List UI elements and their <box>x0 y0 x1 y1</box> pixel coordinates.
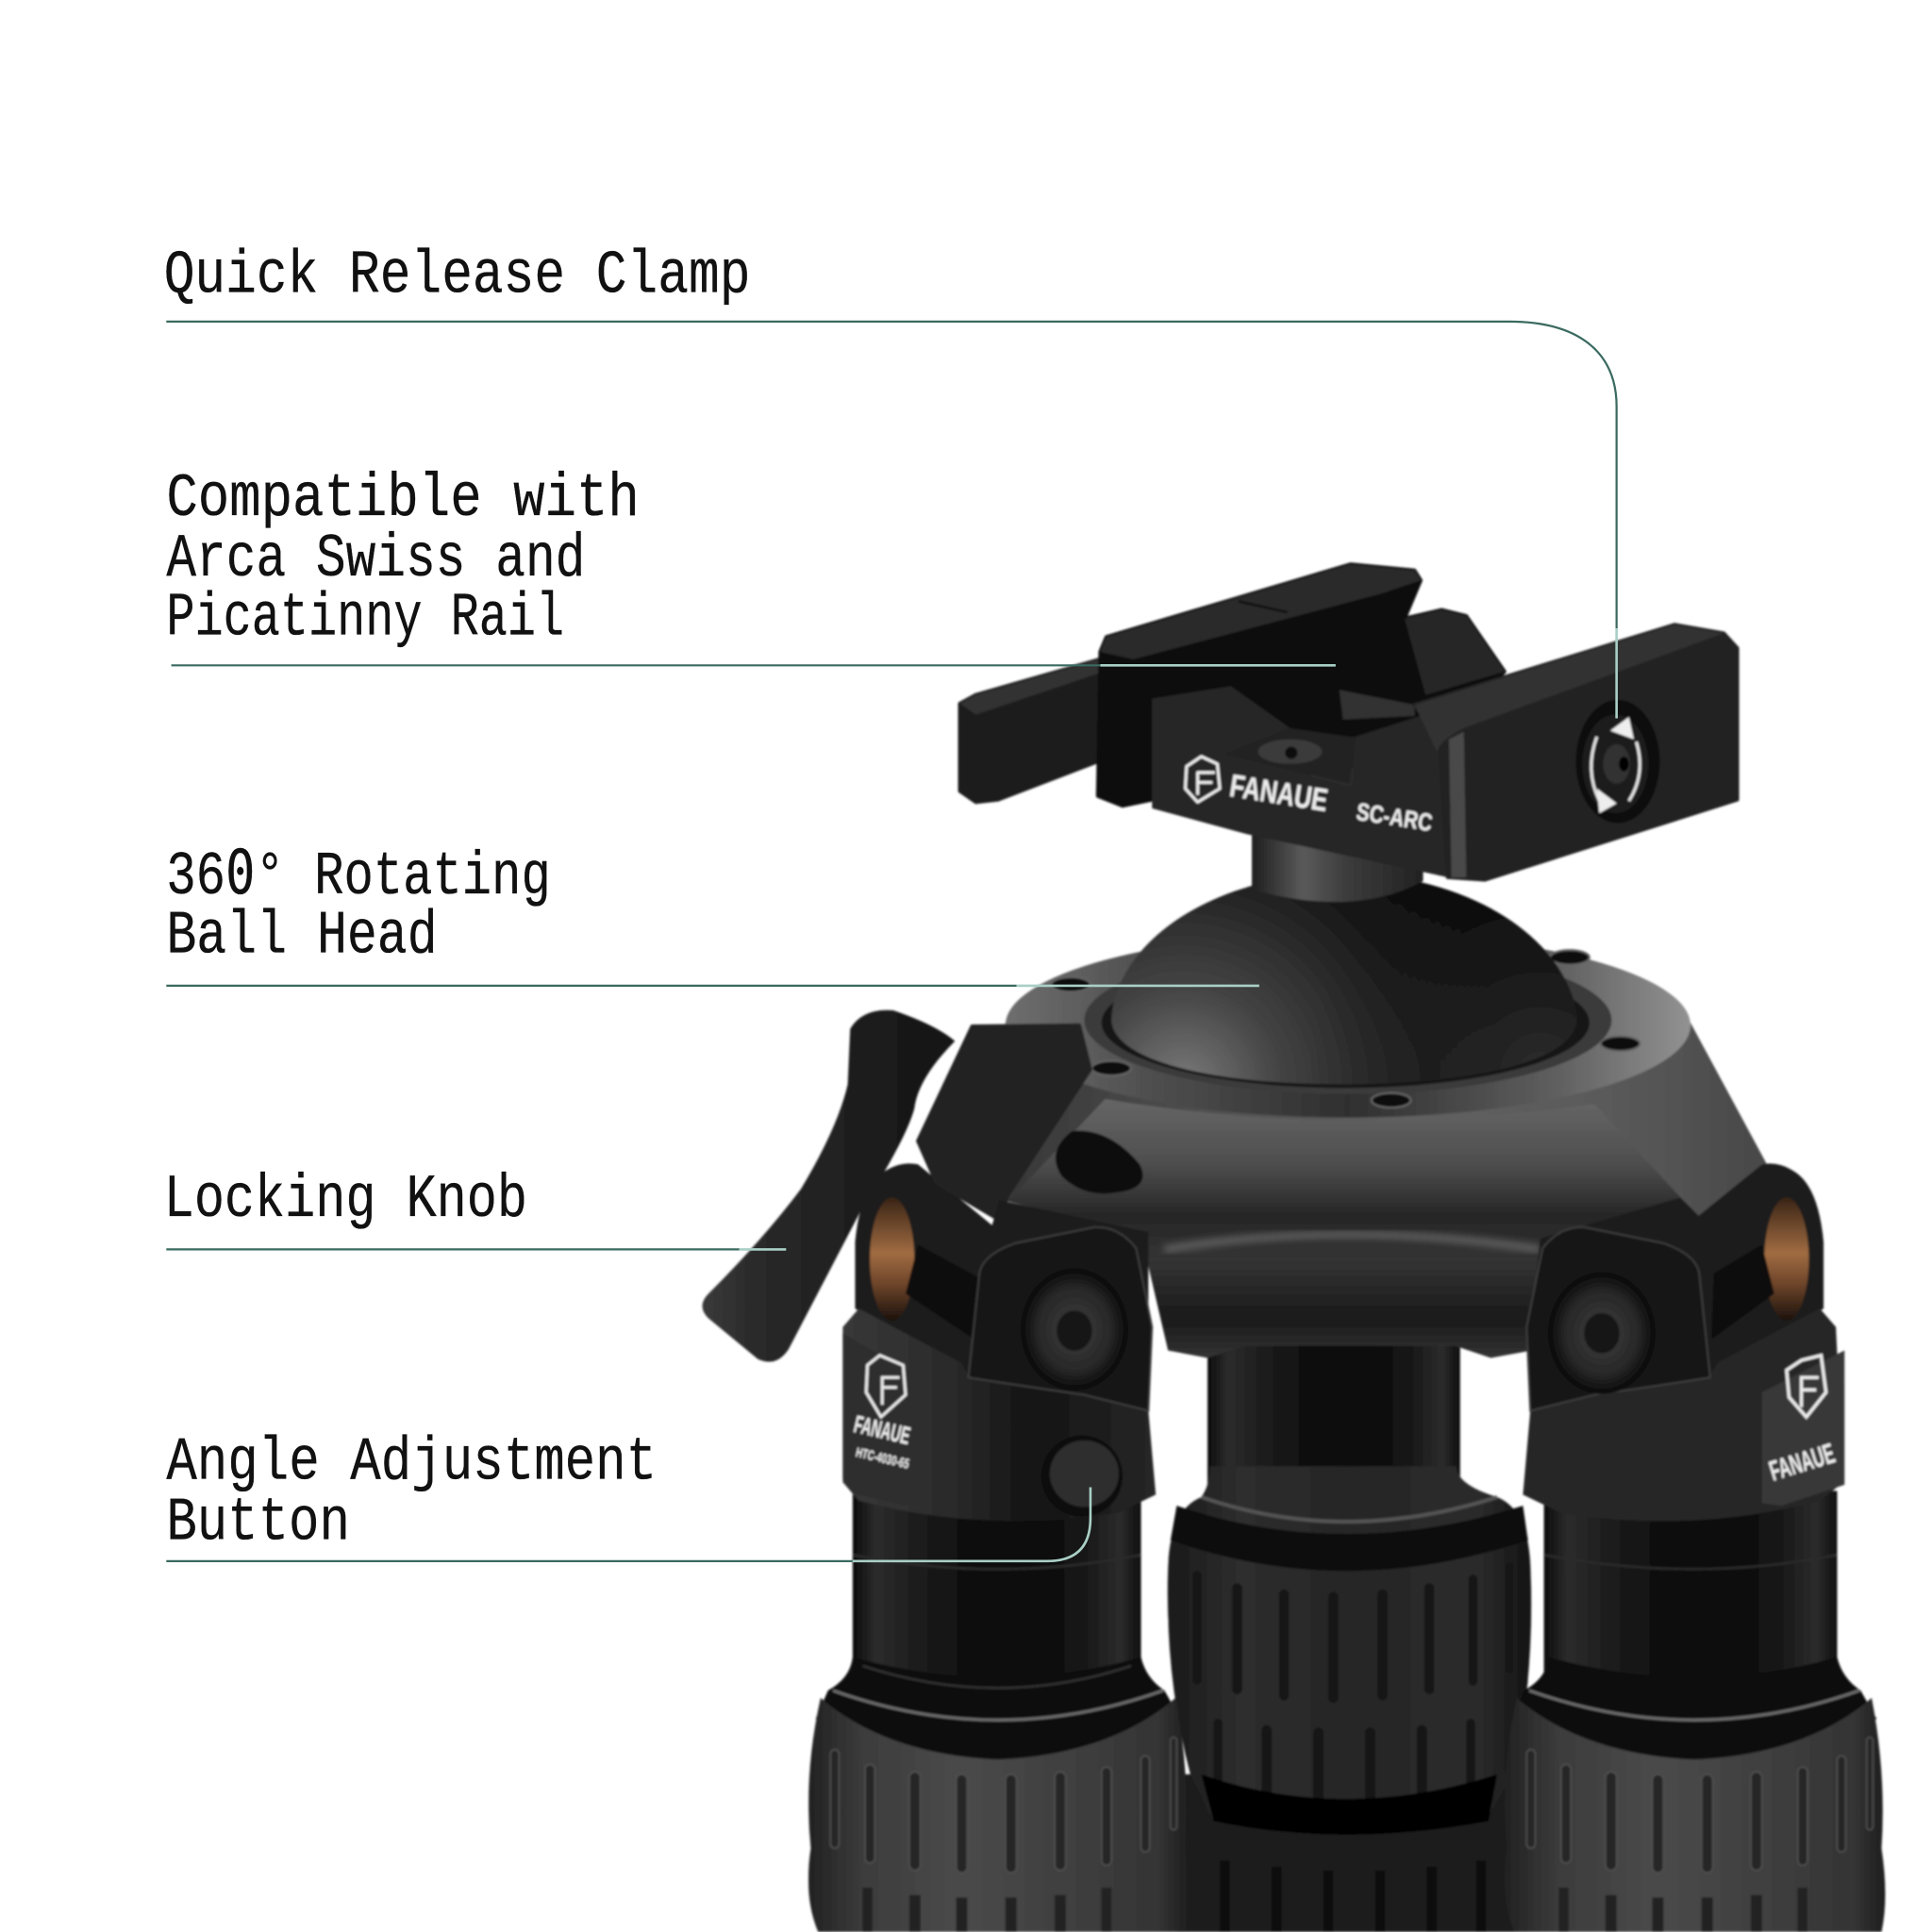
callout line: rail compatibility <box>172 664 1336 666</box>
rear hinge right with copper disc <box>1678 1163 1824 1377</box>
label: Compatible with Arca Swiss and Picatinny Rail: Arca Swiss and <box>166 525 585 594</box>
hub lower shade <box>1008 1099 1681 1357</box>
ring flange <box>1006 933 1690 1118</box>
right jaw <box>1414 625 1738 880</box>
rod <box>1340 690 1414 720</box>
ring screws <box>1051 950 1640 1108</box>
callout line: ball head <box>166 985 1259 987</box>
label: Angle Adjustment Button: Button <box>166 1488 350 1557</box>
left arm filler <box>974 1200 1148 1377</box>
center lower rings and grip <box>1176 1774 1516 1932</box>
front base block: FANAUE <box>1227 768 1330 819</box>
right knuckle <box>1523 1227 1844 1521</box>
tube <box>1544 1491 1837 1707</box>
center leg <box>1168 1331 1531 1932</box>
back jaw <box>1098 564 1505 806</box>
logo plate left <box>842 1333 926 1506</box>
right arm filler <box>1528 1198 1715 1377</box>
label: Angle Adjustment Button: Angle Adjustment <box>166 1427 657 1497</box>
bolt <box>1023 1271 1126 1389</box>
clamp stem <box>1252 825 1424 902</box>
clamp lever <box>959 659 1100 802</box>
center column tube <box>1208 1331 1460 1503</box>
rubber grip <box>1505 1698 1885 1932</box>
label: Compatible with Arca Swiss and Picatinny Rail: Picatinny Rail <box>166 584 564 654</box>
logo plate left: HTC-4030-65 <box>855 1445 910 1473</box>
hub body <box>974 1023 1767 1357</box>
front base block <box>1152 687 1448 877</box>
flared collar <box>816 1657 1180 1764</box>
rotating knob <box>1576 700 1659 823</box>
bolt <box>1550 1274 1654 1392</box>
left leg tube and grip <box>808 1491 1189 1932</box>
tube <box>853 1491 1141 1707</box>
label: Locking Knob: Locking Knob <box>164 1165 527 1235</box>
label: 360° Rotating Ball Head: Ball Head <box>166 902 438 972</box>
label: Compatible with Arca Swiss and Picatinny Rail: Compatible with <box>166 464 640 534</box>
angle adjustment button <box>1041 1436 1123 1517</box>
locking clamp block <box>918 1025 1091 1220</box>
label: Angle Adjustment Button <box>166 1427 657 1557</box>
logo plate right: FANAUE <box>1766 1438 1839 1488</box>
label: 360° Rotating Ball Head <box>166 837 551 972</box>
front base block: SC-ARC <box>1355 797 1435 837</box>
grip ribs <box>830 1738 1176 1873</box>
flared collar <box>1512 1657 1876 1764</box>
left knuckle <box>842 1227 1156 1521</box>
center upper grip <box>1168 1466 1531 1835</box>
QR clamp <box>959 564 1738 880</box>
callout line: angle adjustment button <box>166 1487 1091 1561</box>
callout line: quick release clamp <box>166 322 1617 718</box>
logo plate right <box>1762 1351 1844 1506</box>
ball head dome <box>1111 873 1577 1084</box>
logo <box>1185 757 1220 802</box>
logo plate left: FANAUE <box>851 1409 913 1450</box>
right leg tube and grip <box>1505 1491 1885 1932</box>
label: Compatible with Arca Swiss and Picatinny Rail <box>166 464 640 654</box>
locking lever <box>702 1010 955 1362</box>
hub hole <box>1056 1131 1142 1193</box>
rubber grip <box>808 1698 1189 1932</box>
grip ribs <box>1526 1738 1873 1873</box>
photo: tripod with clamp <box>702 564 1885 1932</box>
label: 360° Rotating Ball Head: 360° Rotating <box>166 837 551 912</box>
rear hinge left with copper disc <box>855 1163 1001 1377</box>
callout line: locking knob <box>166 1248 786 1250</box>
label: Quick Release Clamp: Quick Release Clamp <box>164 242 750 311</box>
